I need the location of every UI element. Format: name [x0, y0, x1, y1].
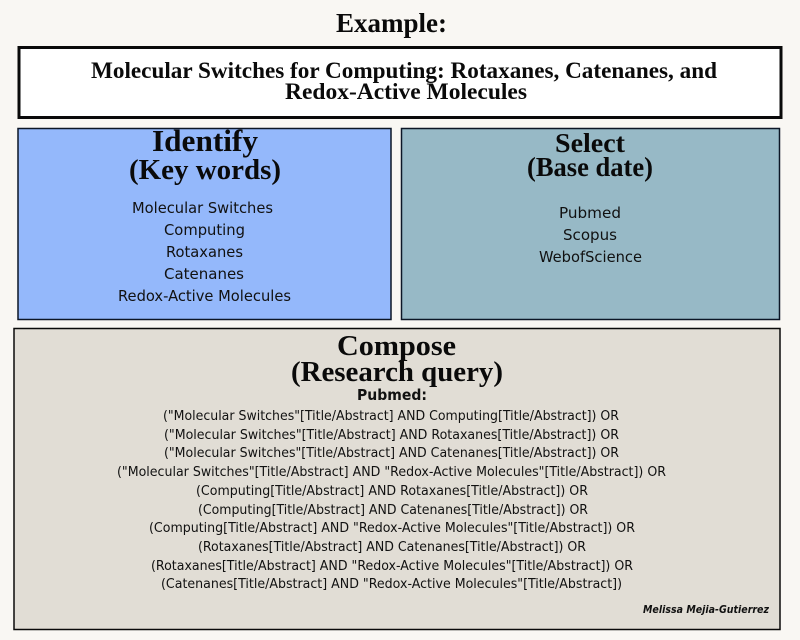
label: Pubmed: Pubmed: [357, 386, 427, 404]
query text: (Computing[Title/Abstract] AND Rotaxanes[Title/Abstract]) OR [196, 483, 588, 499]
heading: select [527, 128, 653, 182]
keyword list: Molecular Switches [132, 199, 273, 217]
heading: identify: Identify [152, 123, 258, 158]
heading: compose [291, 330, 503, 388]
heading: compose: (Research query) [291, 356, 503, 388]
database list: WebofScience [539, 248, 642, 266]
panel: compose research query [14, 328, 780, 630]
panel: article title [19, 48, 781, 118]
query text: (Catenanes[Title/Abstract] AND "Redox-Active Molecules"[Title/Abstract]) [161, 576, 622, 592]
title text: Molecular Switches for Computing: Rotaxanes, Catenanes, and [91, 58, 717, 83]
panel: select base date [402, 128, 780, 320]
database list: Pubmed [559, 204, 621, 222]
title text: Redox-Active Molecules [285, 79, 527, 104]
query text: (Rotaxanes[Title/Abstract] AND Catenanes[Title/Abstract]) OR [198, 539, 586, 555]
query text: ("Molecular Switches"[Title/Abstract] AND Rotaxanes[Title/Abstract]) OR [164, 427, 619, 443]
panel: identify key words [18, 123, 391, 320]
keyword list: Rotaxanes [166, 243, 243, 261]
database list: Scopus [563, 226, 617, 244]
heading: identify: (Key words) [129, 154, 281, 186]
database list [539, 204, 642, 266]
heading: identify [129, 123, 281, 186]
keyword list: Catenanes [164, 265, 244, 283]
query text: ("Molecular Switches"[Title/Abstract] AND Computing[Title/Abstract]) OR [163, 408, 619, 424]
keyword list: Computing [164, 221, 245, 239]
heading: select: (Base date) [527, 152, 653, 182]
query text: (Computing[Title/Abstract] AND "Redox-Active Molecules"[Title/Abstract]) OR [149, 520, 635, 536]
query text [117, 408, 666, 592]
query text: ("Molecular Switches"[Title/Abstract] AND Catenanes[Title/Abstract]) OR [164, 445, 619, 461]
query text: (Rotaxanes[Title/Abstract] AND "Redox-Active Molecules"[Title/Abstract]) OR [151, 558, 633, 574]
query text: ("Molecular Switches"[Title/Abstract] AND "Redox-Active Molecules"[Title/Abstract]) OR [117, 464, 666, 480]
author signature: Melissa Mejia-Gutierrez [643, 603, 770, 616]
query text: (Computing[Title/Abstract] AND Catenanes[Title/Abstract]) OR [198, 502, 588, 518]
keyword list: Redox-Active Molecules [118, 287, 291, 305]
title text [91, 58, 717, 104]
heading: Example: Example: [336, 8, 447, 38]
heading: compose: Compose [337, 330, 456, 362]
heading: select: Select [555, 128, 625, 158]
keyword list [118, 199, 291, 305]
